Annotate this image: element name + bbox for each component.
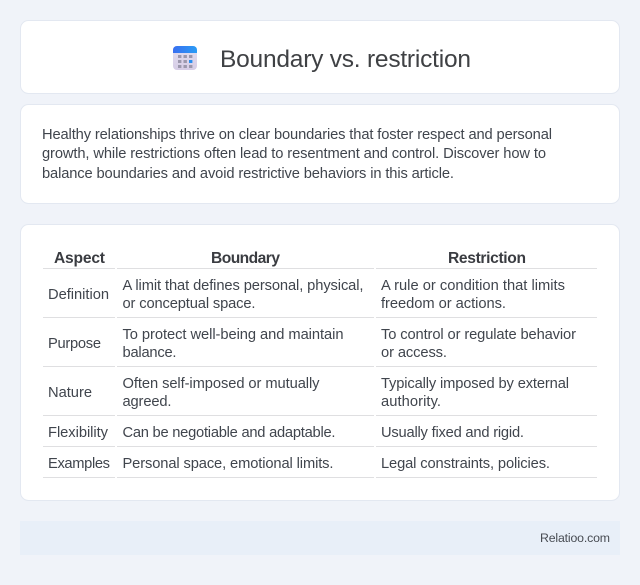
row: definition: Definition — [48, 287, 109, 303]
table header row: Restriction — [448, 250, 526, 267]
row: nature: Typically imposed by external — [381, 376, 569, 392]
intro text — [42, 127, 552, 182]
panel: intro card — [20, 104, 620, 204]
row: flexibility: Can be negotiable and adaptable. — [122, 425, 336, 441]
panel: comparison table — [20, 224, 620, 500]
row: definition: A rule or condition that limits — [381, 278, 565, 294]
row: purpose: To control or regulate behavior — [381, 327, 576, 343]
row: examples — [48, 456, 550, 472]
table header row: Aspect — [54, 250, 105, 267]
row: nature — [48, 376, 569, 410]
title: Boundary vs. restriction — [220, 46, 471, 73]
row: purpose: balance. — [122, 345, 176, 361]
footer bar — [20, 521, 620, 555]
row: purpose: To protect well-being and maintain — [122, 327, 344, 343]
intro text: growth, while restrictions often lead to resentment and control. Discover how to — [42, 146, 546, 162]
row: definition: freedom or actions. — [381, 296, 506, 312]
row: purpose: Purpose — [48, 336, 101, 352]
icon: calendar — [173, 46, 197, 70]
intro text: Healthy relationships thrive on clear boundaries that foster respect and personal — [42, 127, 552, 143]
footer credit: Relatioo.com — [540, 531, 610, 545]
table header row — [54, 250, 526, 267]
panel: header card — [20, 20, 620, 94]
row: flexibility: Usually fixed and rigid. — [381, 425, 524, 441]
row: examples: Legal constraints, policies. — [381, 456, 550, 472]
row: nature: agreed. — [122, 394, 172, 410]
row: nature: Nature — [48, 385, 92, 401]
row: flexibility — [48, 425, 524, 441]
row: definition: A limit that defines personal, physical, — [122, 278, 364, 294]
row: nature: authority. — [381, 394, 441, 410]
intro text: balance boundaries and avoid restrictive behaviors in this article. — [42, 166, 454, 182]
table header row: Boundary — [211, 250, 280, 267]
row: examples: Examples — [48, 456, 110, 472]
row: examples: Personal space, emotional limits. — [122, 456, 334, 472]
row: purpose: or access. — [381, 345, 447, 361]
row: nature: Often self-imposed or mutually — [122, 376, 320, 392]
row: definition: or conceptual space. — [122, 296, 256, 312]
row: definition — [48, 278, 565, 312]
row: purpose — [48, 327, 576, 361]
row: flexibility: Flexibility — [48, 425, 109, 441]
